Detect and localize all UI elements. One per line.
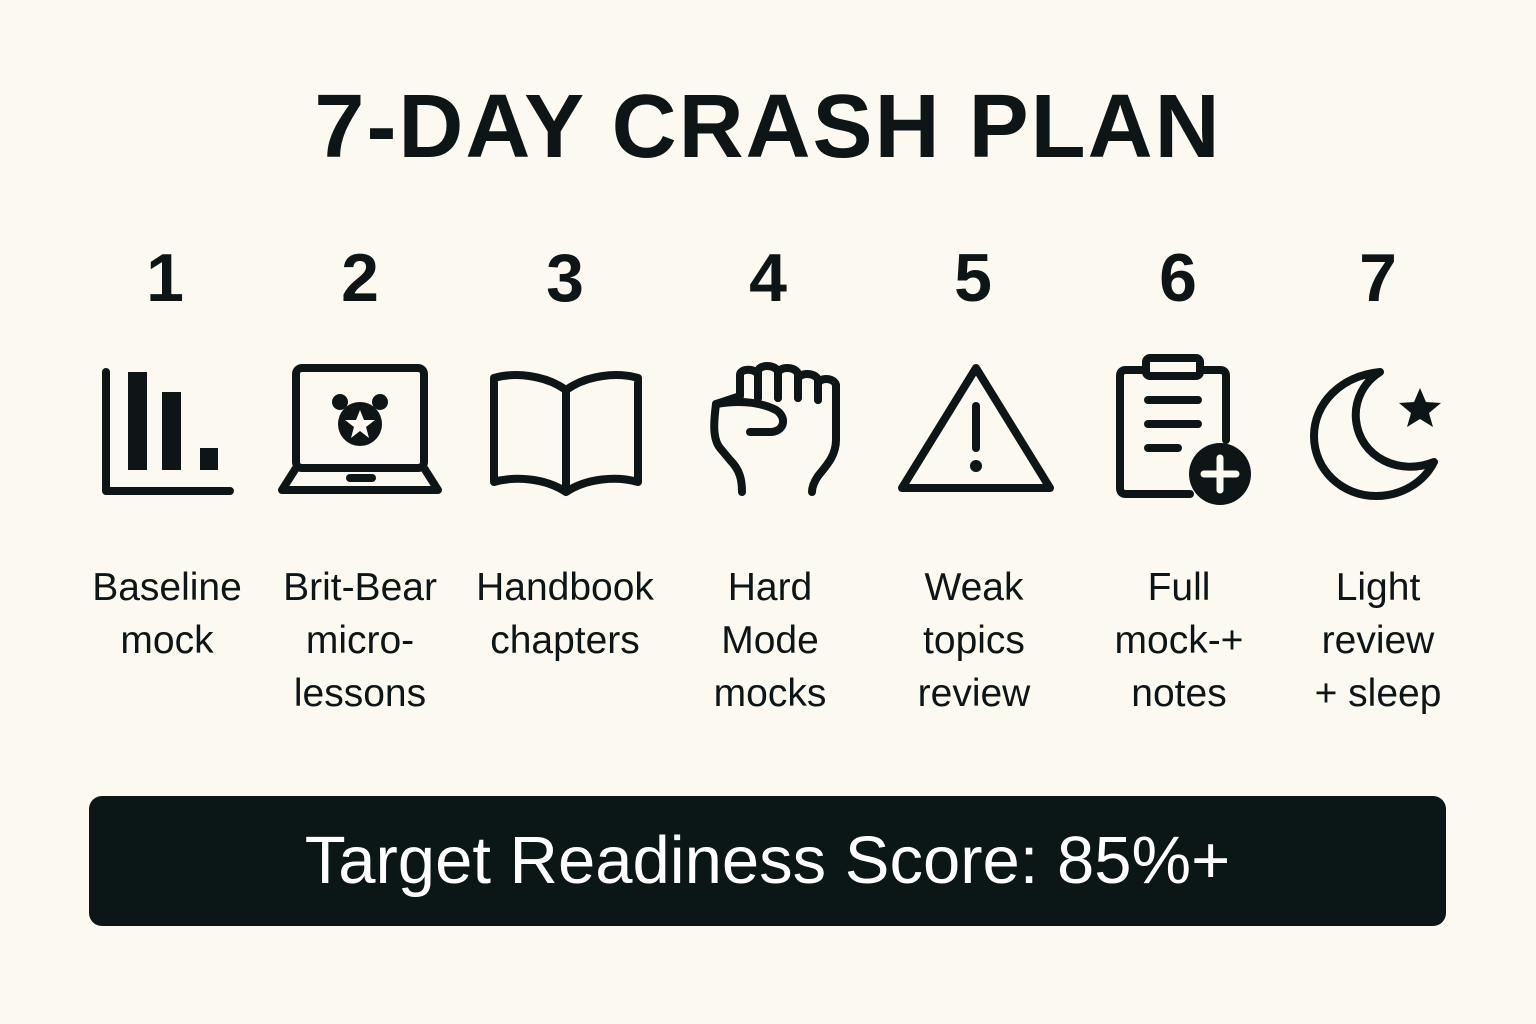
day labels: Brit-Bear	[283, 566, 437, 609]
day labels: mocks	[714, 672, 826, 715]
icon: laptop	[282, 368, 438, 490]
icon: open book	[494, 375, 638, 492]
day numbers: 6	[1159, 240, 1197, 316]
day numbers: 3	[546, 240, 584, 316]
icon: bar chart	[106, 372, 230, 491]
icon: fist	[714, 366, 836, 492]
day labels: Mode	[721, 619, 819, 662]
day labels: Full	[1148, 566, 1210, 609]
day numbers: 4	[749, 240, 787, 316]
day labels: + sleep	[1315, 672, 1441, 715]
title: 7-DAY CRASH PLAN	[314, 77, 1222, 177]
day labels: review	[1322, 619, 1434, 662]
day labels: mock-+	[1115, 619, 1243, 662]
day numbers	[146, 240, 1397, 316]
day labels	[92, 566, 1441, 715]
day numbers: 2	[341, 240, 379, 316]
day labels: Weak	[924, 566, 1024, 609]
target banner	[89, 796, 1446, 926]
icon: clipboard	[1120, 358, 1251, 505]
day labels: review	[918, 672, 1030, 715]
day labels: mock	[120, 619, 214, 662]
day labels: notes	[1131, 672, 1227, 715]
day labels: chapters	[490, 619, 640, 662]
day numbers: 7	[1359, 240, 1397, 316]
day labels: lessons	[294, 672, 426, 715]
target banner: Target Readiness Score: 85%+	[305, 823, 1230, 898]
day numbers: 5	[954, 240, 992, 316]
day labels: Handbook	[476, 566, 654, 609]
day labels: Baseline	[92, 566, 242, 609]
day labels: Hard	[728, 566, 812, 609]
icon: warning	[902, 368, 1050, 488]
day labels: micro-	[306, 619, 414, 662]
day numbers: 1	[146, 240, 184, 316]
day labels: Light	[1336, 566, 1420, 609]
day labels: topics	[923, 619, 1025, 662]
icon: moon and star	[1314, 372, 1441, 496]
